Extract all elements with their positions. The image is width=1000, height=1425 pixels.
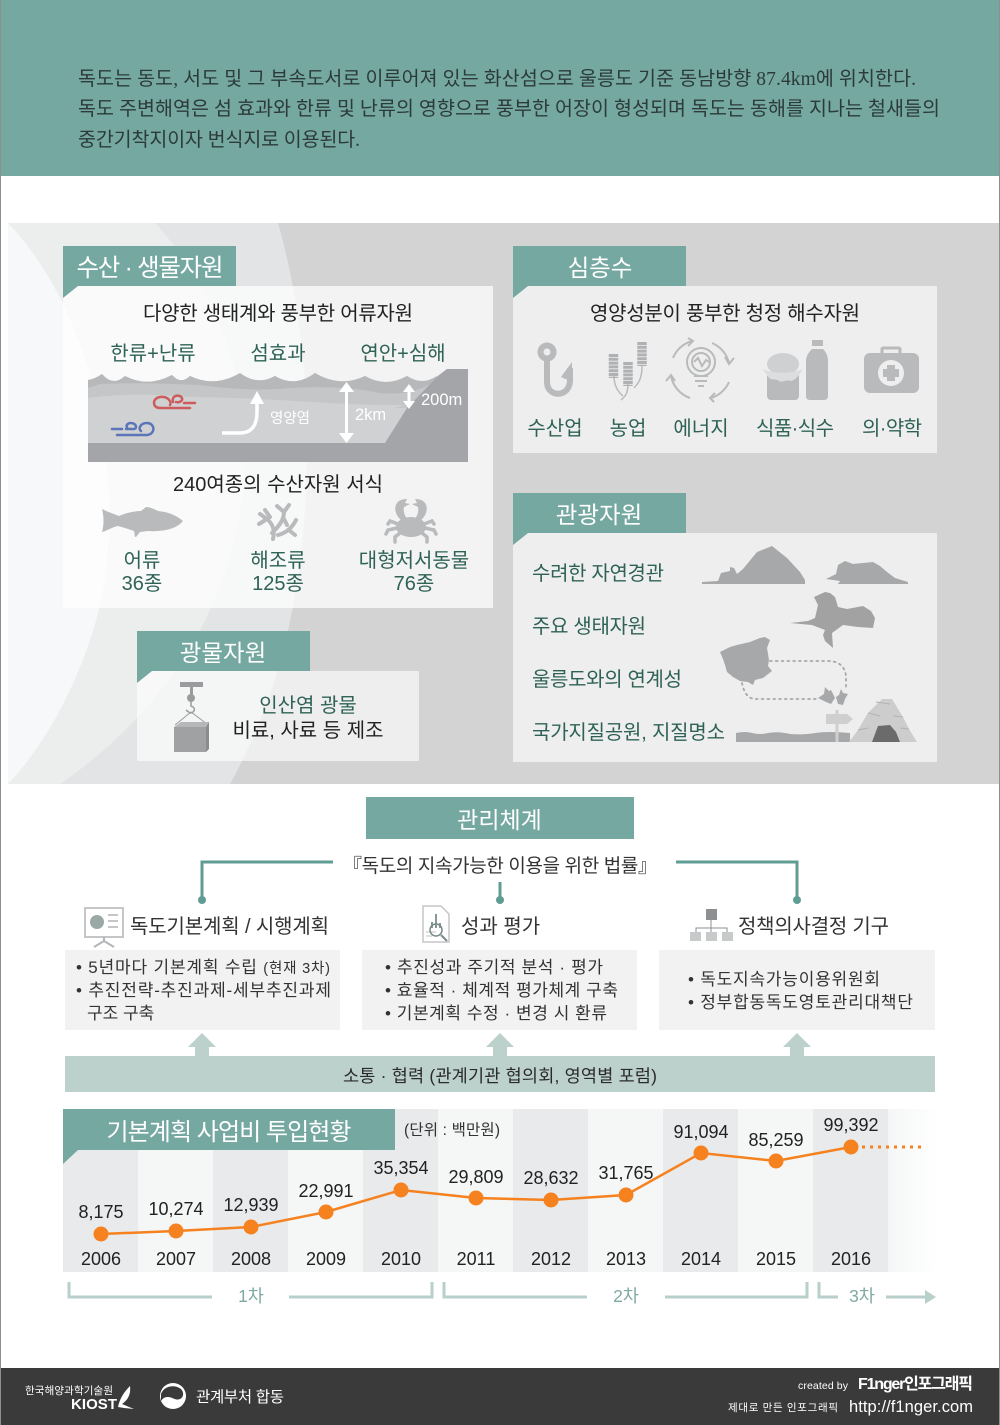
heading: management system [366, 797, 634, 839]
chart title tab: 기본계획 사업비 투입현황 [106, 1119, 352, 1146]
pillar: basic plan [65, 908, 340, 1030]
tab heading: deep sea water: 심층수 [568, 255, 632, 281]
label: 2km: 2km [355, 406, 386, 424]
text: creator: F1nger인포그래픽 [858, 1375, 973, 1393]
label: agriculture: 농업 [610, 417, 646, 440]
heading: decision body: 정책의사결정 기구 [738, 915, 889, 938]
logo: government emblem [160, 1383, 186, 1409]
icon: coast, signpost and cave [736, 699, 917, 742]
heading: basic plan: 독도기본계획 / 시행계획 [130, 915, 329, 938]
panel: deep sea water [513, 246, 937, 453]
panel: tourism resources [513, 493, 937, 762]
text: key ecological resources: 주요 생태자원 [532, 615, 646, 638]
box: decision body details: • 독도지속가능이용위원회 [688, 970, 880, 989]
heading: performance evaluation: 성과 평가 [461, 915, 540, 938]
stat: seaweed species: 125종 [252, 573, 304, 595]
data values: 22,991 [298, 1181, 354, 1201]
label: coast and deep sea: 연안+심해 [360, 342, 446, 365]
panel: mineral resources [137, 631, 419, 761]
year labels: 2009 [306, 1249, 346, 1269]
text: joint ministries: 관계부처 합동 [196, 1388, 284, 1406]
tab heading: fisheries: 수산 · 생물자원 [76, 254, 224, 282]
data line [94, 1140, 926, 1242]
data values: 8,175 [78, 1202, 124, 1222]
year labels: 2007 [156, 1249, 196, 1269]
text: tagline and url: 제대로 만든 인포그래픽 [728, 1402, 838, 1414]
box: evaluation details: • 추진성과 주기적 분석 · 평가 [385, 958, 603, 977]
year labels: 2008 [231, 1249, 271, 1269]
year labels: 2012 [531, 1249, 571, 1269]
tab heading: fisheries [63, 246, 236, 298]
icon: energy bulb [666, 338, 734, 402]
icon: medical kit [864, 348, 919, 393]
label: fisheries industry: 수산업 [527, 417, 583, 440]
text: creator [798, 1375, 973, 1393]
text: creator: created by [798, 1380, 849, 1392]
connectors from law to three pillars [198, 862, 801, 904]
tab heading: tourism [513, 493, 686, 545]
data values: 85,259 [748, 1130, 804, 1150]
unit label: (단위 : 백만원) [404, 1121, 500, 1139]
icon: crab [386, 499, 436, 542]
icon: jar and bottle [762, 340, 828, 400]
box: evaluation details: • 기본계획 수정 · 변경 시 환류 [385, 1004, 607, 1023]
subheading: clean seawater: 영양성분이 풍부한 청정 해수자원 [590, 302, 860, 325]
text: tagline and url: http://f1nger.com [849, 1398, 973, 1416]
data values: 99,392 [823, 1115, 879, 1135]
icon: document magnifier [423, 906, 449, 942]
icon: presentation board [85, 908, 123, 947]
year labels [81, 1249, 871, 1269]
subheading: ecosystem: 다양한 생태계와 풍부한 어류자원 [143, 302, 413, 325]
arrow: 200m depth [403, 384, 415, 409]
stat: fish species [122, 549, 162, 595]
chart: basic plan budget 2006-2016 [63, 1109, 938, 1272]
data values: 91,094 [673, 1122, 729, 1142]
data values [78, 1115, 879, 1222]
plan period brackets [69, 1282, 936, 1306]
bar: communication and cooperation [65, 1056, 935, 1092]
bar: communication and cooperation: 소통 · 협력 (관계기관 협의회, 영역별 포럼) [343, 1066, 657, 1086]
data values: 10,274 [148, 1199, 204, 1219]
subheading: species: 240여종의 수산자원 서식 [173, 473, 383, 496]
icon: warm current [154, 396, 195, 408]
text: natural scenery: 수려한 자연경관 [532, 562, 664, 585]
data values: 28,632 [523, 1168, 579, 1188]
icon: seaweed [259, 505, 296, 539]
data values: 35,354 [373, 1158, 429, 1178]
year labels: 2014 [681, 1249, 721, 1269]
year labels: 2015 [756, 1249, 796, 1269]
stat: benthos species: 대형저서동물 [359, 549, 469, 572]
stat: benthos species: 76종 [394, 573, 434, 595]
pillar: performance evaluation [362, 906, 637, 1030]
arrow: 2km depth [339, 382, 354, 443]
stat: fish species: 36종 [122, 573, 162, 595]
year labels: 2010 [381, 1249, 421, 1269]
icon: fish [102, 507, 183, 537]
icon: wheat [614, 342, 642, 400]
label: currents: 한류+난류 [110, 342, 196, 365]
text: fertilizer and feed: 비료, 사료 등 제조 [232, 719, 384, 742]
up arrows from cooperation bar [188, 1033, 811, 1056]
box: basic plan details: • 추진전략-추진과제-세부추진과제 [76, 981, 331, 1000]
label: phase 3: 3차 [849, 1286, 875, 1306]
text: tagline and url [728, 1398, 973, 1416]
year labels: 2006 [81, 1249, 121, 1269]
label: energy: 에너지 [673, 417, 729, 440]
chart title tab [63, 1109, 395, 1164]
logo: KIOST: 한국해양과학기술원 [25, 1384, 113, 1397]
stat: fish species: 어류 [124, 549, 160, 572]
label: phase 1: 1차 [238, 1286, 264, 1306]
box: basic plan details: 구조 구축 [87, 1004, 154, 1023]
ocean cross-section diagram [88, 369, 468, 462]
icon: crane and box [174, 682, 209, 752]
year labels: 2011 [457, 1249, 495, 1269]
tab heading: minerals [137, 631, 310, 683]
icon: cold current [112, 423, 153, 435]
top intro banner [0, 0, 1000, 176]
stat: benthos species [359, 549, 469, 595]
tab heading: deep sea water [513, 246, 686, 298]
year labels: 2013 [606, 1249, 646, 1269]
icon: Dokdo islands [702, 546, 908, 584]
stat: seaweed species [250, 549, 306, 595]
tab heading: minerals: 광물자원 [180, 640, 266, 666]
heading: management system: 관리체계 [457, 807, 542, 833]
box: evaluation details: • 효율적 · 체계적 평가체계 구축 [385, 981, 618, 1000]
logo: KIOST: KIOST [71, 1396, 117, 1413]
text: geopark: 국가지질공원, 지질명소 [532, 721, 725, 744]
data values: 31,765 [598, 1163, 654, 1183]
text: law title: 『독도의 지속가능한 이용을 위한 법률』 [343, 855, 657, 877]
label: phase 2: 2차 [613, 1286, 639, 1306]
box: basic plan details: • 5년마다 기본계획 수립 (현재 3차) [76, 958, 330, 977]
box: evaluation details [362, 950, 637, 1030]
logo: KIOST [25, 1384, 134, 1413]
box: basic plan details [65, 950, 340, 1030]
icon: organization chart [690, 909, 733, 941]
text: link to Ulleungdo: 울릉도와의 연계성 [532, 668, 682, 691]
top intro banner: 독도 주변해역은 섬 효과와 한류 및 난류의 영향으로 풍부한 어장이 형성되며 독도는 동해를 지나는 철새들의 [78, 98, 940, 120]
top intro banner: 독도는 동도, 서도 및 그 부속도서로 이루어져 있는 화산섬으로 울릉도 기준 동남방향 87.4km에 위치한다. [78, 68, 916, 90]
top intro banner: 중간기착지이자 번식지로 이용된다. [78, 129, 360, 151]
icon: Ulleungdo map with route [720, 637, 848, 705]
stat: seaweed species: 해조류 [250, 549, 306, 572]
label: medicine: 의·약학 [862, 417, 922, 440]
footer [0, 1368, 1000, 1425]
resources section background [8, 223, 1000, 784]
label: nutrients: 영양염 [270, 410, 310, 427]
label: food and drink: 식품·식수 [756, 417, 834, 440]
data values: 12,939 [223, 1195, 279, 1215]
box: decision body details: • 정부합동독도영토관리대책단 [688, 993, 913, 1012]
box: decision body details [659, 950, 935, 1030]
arrow: nutrient upwelling [222, 391, 264, 433]
pillar: policy decision body [659, 909, 935, 1030]
text: phosphate minerals: 인산염 광물 [259, 694, 357, 717]
label: island effect: 섬효과 [250, 342, 306, 365]
tab heading: tourism: 관광자원 [556, 502, 642, 528]
icon: fish hook [540, 346, 572, 394]
label: 200m: 200m [421, 391, 462, 409]
icon: sea lion [790, 592, 875, 648]
data values: 29,809 [448, 1167, 504, 1187]
year labels: 2016 [831, 1249, 871, 1269]
panel: fisheries and biological resources [63, 246, 493, 608]
